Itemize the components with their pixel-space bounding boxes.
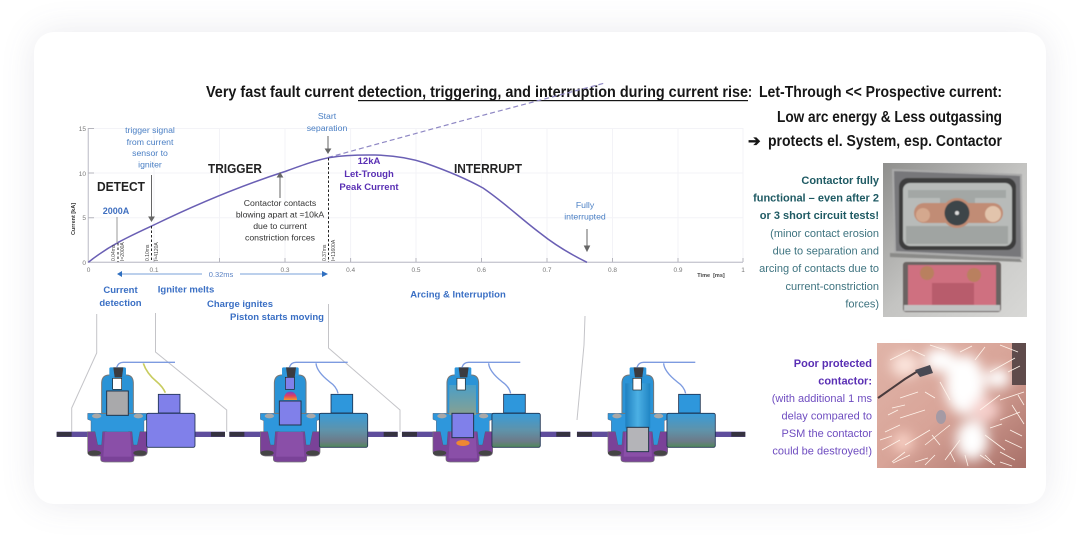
- label: start separation: Start: [318, 111, 337, 121]
- x axis labels: 0.5: [411, 267, 421, 274]
- text block: contactor fully functional: arcing of contacts due to: [759, 263, 879, 275]
- text block: poor protected contactor: [772, 358, 872, 458]
- label: peak current: Peak Current: [339, 182, 399, 193]
- label: contacts blowing apart: Contactor contacts: [244, 198, 317, 208]
- dotted time markers: [118, 158, 328, 262]
- x axis labels: 0.7: [542, 267, 552, 274]
- label: trigger signal: igniter: [138, 160, 162, 170]
- arrows: chart callouts: [117, 136, 590, 251]
- text block: contactor fully functional: or 3 short circuit tests!: [760, 210, 879, 222]
- y axis labels: 15: [79, 126, 86, 133]
- title: protects el. System, esp. Contactor: [768, 133, 1002, 150]
- rotated time marker labels: I=11600A: [331, 239, 337, 261]
- label: contacts blowing apart: constriction forces: [245, 232, 316, 242]
- text block: poor protected contactor: Poor protected: [794, 358, 872, 370]
- rotated time marker labels: 0.37ms: [322, 244, 328, 261]
- label: start separation: separation: [307, 123, 347, 133]
- text block: contactor fully functional: forces): [845, 298, 879, 310]
- label: fully interrupted: Fully: [576, 200, 595, 210]
- title: Very fast fault current: [206, 84, 354, 101]
- rotated time marker labels: [111, 239, 337, 261]
- phase labels below chart: [99, 284, 506, 323]
- x axis labels: 0.4: [346, 267, 355, 274]
- rotated time marker labels: 0.10ms: [145, 244, 151, 261]
- label: fully interrupted: [564, 200, 606, 222]
- text block: contactor fully functional: current-constriction: [785, 281, 879, 293]
- title: ➔: [748, 133, 761, 150]
- y axis labels: 0: [82, 260, 86, 267]
- arrow: 0.32ms span: [117, 270, 328, 279]
- label: trigger signal: from current: [127, 137, 174, 147]
- photo: opened contactor: [883, 163, 1027, 317]
- x axis labels: [87, 267, 745, 279]
- x axis labels: 0.6: [477, 267, 486, 274]
- x axis labels: 0: [87, 267, 91, 274]
- phase labels below chart: Arcing & Interruption: [410, 290, 506, 300]
- label: start separation: [307, 111, 347, 133]
- line chart: current versus time: [71, 83, 745, 279]
- text block: poor protected contactor: contactor:: [818, 376, 872, 388]
- text block: poor protected contactor: delay compared to: [782, 410, 872, 422]
- rotated time marker labels: I=4120A: [154, 242, 160, 261]
- x axis labels: 0.3: [280, 267, 290, 274]
- connector lines from chart to diagrams: [72, 304, 585, 432]
- text block: contactor fully functional: Contactor fully: [801, 175, 880, 187]
- y axis labels: 5: [82, 215, 86, 222]
- y axis labels: [71, 126, 86, 267]
- photo: destroyed contactor sparks: [877, 343, 1026, 468]
- text block: poor protected contactor: (with additional 1 ms: [772, 393, 872, 405]
- text block: contactor fully functional: (minor contact erosion: [770, 228, 879, 240]
- text block: contactor fully functional: due to separation and: [773, 246, 879, 258]
- phase labels below chart: Current: [103, 285, 138, 296]
- diagram 3: arcing: [402, 362, 570, 462]
- prospective current dashed line: [328, 83, 605, 158]
- x axis labels: Time [ms]: [697, 273, 725, 279]
- phase heading: trigger: TRIGGER: [208, 162, 262, 176]
- label: trigger signal: trigger signal: [125, 125, 175, 135]
- diagram 1: current detection: [57, 362, 225, 462]
- rotated time marker labels: I=2000A: [120, 242, 126, 261]
- phase labels below chart: Charge ignites: [207, 299, 273, 310]
- title: Low arc energy & Less outgassing: [777, 109, 1002, 126]
- label: 2000A: 2000A: [103, 206, 130, 216]
- let-through current curve: [88, 155, 587, 262]
- label: contacts blowing apart: due to current: [253, 221, 307, 231]
- diagram 2: igniter melts and charge ignites: [229, 362, 398, 462]
- phase labels below chart: Piston starts moving: [230, 312, 324, 323]
- y axis labels: 10: [79, 171, 86, 178]
- label: trigger signal: sensor to: [132, 148, 168, 158]
- title: detection, triggering, and interruption during current rise: [358, 84, 748, 101]
- title: :: [748, 84, 752, 101]
- title: Let-Through << Prospective current:: [759, 84, 1002, 101]
- x axis labels: 0.9: [673, 267, 683, 274]
- label: peak current: 12kA: [358, 156, 380, 167]
- text block: contactor fully functional: functional – even after 2: [753, 192, 879, 204]
- label: peak current: Let-Trough: [344, 169, 394, 180]
- phase heading: interrupt: INTERRUPT: [454, 162, 522, 176]
- label: trigger signal: [125, 125, 175, 170]
- text block: poor protected contactor: PSM the contactor: [782, 428, 872, 440]
- rotated time marker labels: 0.04ms: [111, 244, 117, 261]
- x axis labels: 0.8: [608, 267, 617, 274]
- x axis labels: 0.1: [149, 267, 159, 274]
- phase labels below chart: detection: [99, 298, 142, 309]
- label: contacts blowing apart: [236, 198, 324, 242]
- title: [206, 84, 1002, 150]
- phase heading: detect: DETECT: [97, 180, 145, 194]
- x axis labels: 1: [741, 267, 745, 274]
- phase labels below chart: Igniter melts: [158, 284, 214, 296]
- label: contacts blowing apart: blowing apart at ≈10kA: [236, 210, 324, 220]
- label: peak current: [339, 156, 399, 193]
- y axis labels: Current [kA]: [71, 203, 77, 235]
- diagram 4: fully interrupted: [577, 362, 745, 462]
- text block: contactor fully functional: [753, 175, 880, 310]
- arrow: 0.32ms span: 0.32ms: [209, 270, 234, 279]
- label: fully interrupted: interrupted: [564, 212, 606, 222]
- text block: poor protected contactor: could be destroyed!): [772, 446, 872, 458]
